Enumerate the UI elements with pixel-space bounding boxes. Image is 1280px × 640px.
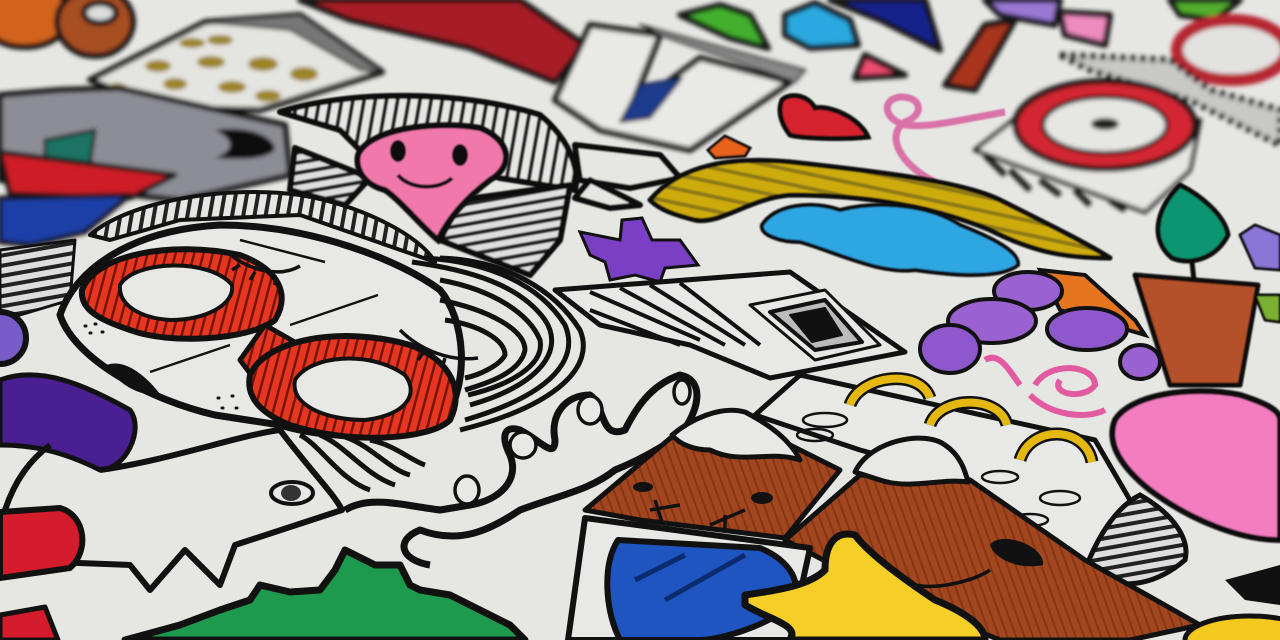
nose line and mouth	[150, 240, 378, 372]
grapes	[920, 270, 1160, 415]
pink balloon	[1112, 391, 1280, 540]
glasses	[82, 249, 282, 339]
heart	[780, 96, 868, 138]
wavy hair stripes	[300, 258, 583, 490]
striped hood	[280, 96, 680, 275]
top right shapes	[945, 20, 1015, 90]
yellow star	[745, 534, 985, 640]
mountain faces	[633, 482, 1043, 566]
yellow blob bottom right	[1185, 616, 1280, 640]
notebook with yellow rings	[755, 375, 1130, 565]
leaf and plant pot	[1135, 185, 1280, 385]
green blob	[680, 5, 768, 48]
face	[60, 225, 461, 436]
boat	[0, 130, 175, 245]
top blurred doodles	[0, 0, 1280, 245]
cyan blob	[785, 3, 858, 48]
black splat right	[1225, 565, 1280, 605]
small orange heart	[708, 136, 750, 158]
grey hair	[90, 192, 435, 262]
small pink triangle	[855, 55, 905, 78]
closed eye lashes	[232, 256, 478, 368]
pink light bulb	[357, 125, 506, 240]
pink squiggle	[887, 97, 1005, 182]
yellow hair band	[650, 160, 1110, 258]
left purple bow and body	[0, 312, 342, 640]
orange rings top-left	[0, 0, 133, 56]
freckles	[85, 324, 237, 408]
white letter U	[555, 25, 805, 150]
navy triangle	[830, 0, 940, 50]
brown mountains	[585, 410, 1200, 640]
blue cloud	[762, 205, 1018, 275]
hand with fingers	[345, 375, 697, 565]
red comb	[300, 0, 585, 82]
grey robot	[0, 88, 290, 200]
green bush	[125, 550, 525, 640]
red glasses and face	[0, 192, 478, 438]
striped cylinder	[1085, 495, 1186, 584]
finger nails	[455, 380, 690, 504]
blue screen box	[568, 518, 810, 640]
red gear ring	[975, 81, 1200, 212]
striped left hair	[0, 240, 75, 315]
calculator panel	[90, 15, 382, 110]
purple flower	[580, 218, 698, 282]
feather / diagram box	[555, 272, 905, 378]
